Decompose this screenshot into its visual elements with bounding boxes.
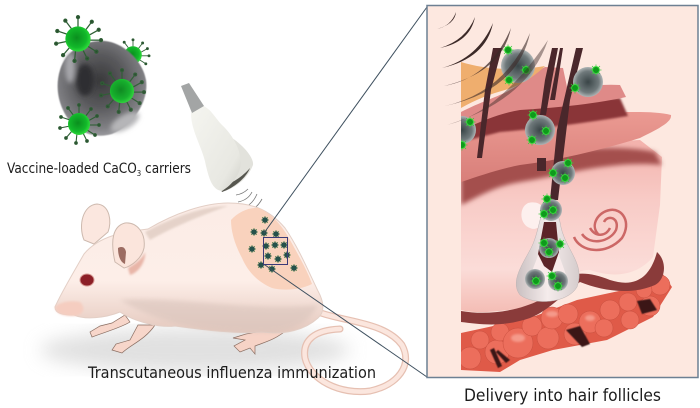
virus particles on skin bbox=[248, 216, 298, 273]
epidermis lower fold bbox=[461, 112, 671, 182]
back foot bbox=[233, 322, 288, 354]
back ear bbox=[82, 204, 110, 244]
sound waves bbox=[236, 189, 262, 213]
icon: ultrasound probe bbox=[181, 83, 262, 213]
virus on top bbox=[55, 16, 102, 62]
probe rear shell bbox=[214, 138, 253, 192]
probe tip bbox=[181, 83, 204, 113]
carriers in skin bbox=[448, 49, 603, 291]
hairs in fat bbox=[490, 299, 657, 368]
shadow under mouse bbox=[40, 328, 350, 372]
eye bbox=[80, 274, 94, 286]
probe dark facet bbox=[220, 168, 250, 192]
caption: carriers: Vaccine-loaded CaCO bbox=[7, 161, 157, 177]
front ear bbox=[113, 223, 144, 268]
hair inside follicle bbox=[538, 222, 559, 272]
stratum orange bbox=[461, 62, 545, 108]
sebaceous gland bbox=[521, 202, 543, 229]
sub-dermal dark band bbox=[461, 252, 664, 324]
pink skin patch bbox=[231, 208, 312, 290]
belly fur shading bbox=[120, 299, 318, 332]
front foot far bbox=[90, 315, 130, 337]
fat layer bbox=[459, 270, 672, 372]
panel frame bbox=[427, 6, 698, 378]
virus in center bbox=[100, 69, 145, 113]
icon: vaccine-loaded CaCO3 carrier bbox=[55, 16, 150, 144]
dermis bbox=[461, 140, 662, 312]
dermis dark red band bbox=[461, 148, 662, 205]
green viruses bbox=[456, 44, 602, 292]
follicle bulb bbox=[516, 216, 580, 302]
body bbox=[55, 203, 323, 333]
epidermis dark fold bbox=[461, 98, 628, 142]
ultrasound waves bbox=[437, 12, 548, 125]
skin section bbox=[448, 44, 672, 372]
inner ear bbox=[118, 247, 126, 264]
virus behind carrier bbox=[117, 39, 150, 71]
selection square bbox=[264, 238, 288, 264]
carrier particle bbox=[58, 41, 146, 136]
caption: immunization: Transcutaneous influenza immunization bbox=[87, 363, 376, 382]
caption: delivery: Delivery into hair follicles bbox=[464, 386, 661, 406]
fat highlights bbox=[511, 311, 595, 342]
front foot near bbox=[112, 325, 155, 353]
nose and mouth bbox=[55, 301, 83, 316]
ear shadow bbox=[128, 252, 145, 275]
zoom connector lines bbox=[264, 7, 427, 377]
virus lower bbox=[59, 104, 100, 144]
follicle inner bbox=[532, 254, 566, 274]
panel: hair follicle skin cross-section bbox=[427, 6, 698, 378]
sweat coil bbox=[574, 210, 626, 250]
caption: carriers: 3 bbox=[137, 169, 141, 178]
carrier surface mottling bbox=[65, 53, 142, 136]
epidermis top bbox=[461, 67, 626, 130]
caption: carriers: carriers bbox=[141, 161, 191, 177]
back fur shading bbox=[145, 206, 228, 240]
hair shafts bbox=[477, 48, 583, 200]
mouse illustration bbox=[40, 203, 406, 392]
probe body bbox=[191, 106, 241, 191]
tail bbox=[305, 312, 406, 392]
